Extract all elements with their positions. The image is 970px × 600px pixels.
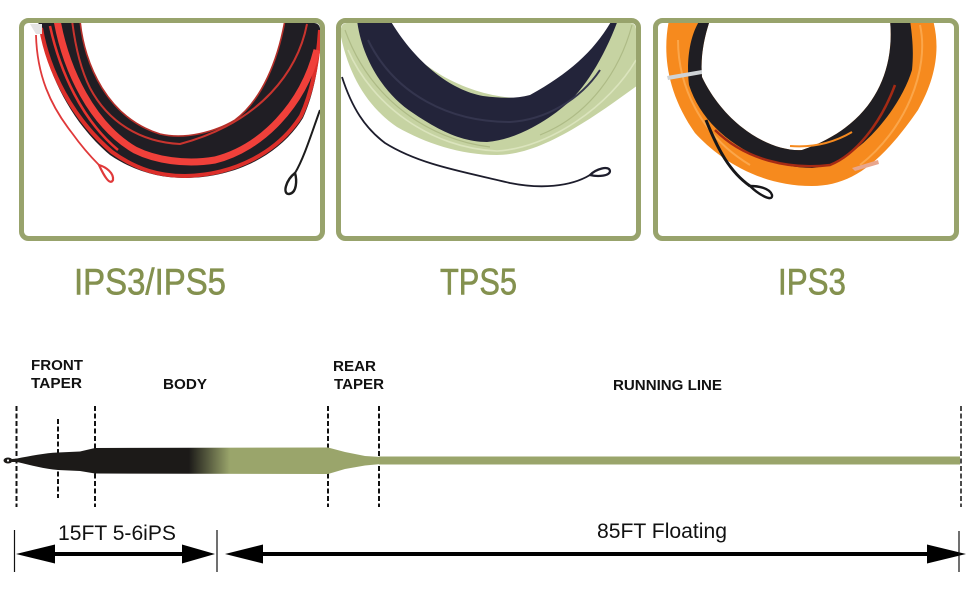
running line [379,456,960,464]
measurement: 15FT head [14,522,217,572]
panel: TPS5 green and black line [338,20,638,238]
head and body taper [12,448,381,474]
text: 85FT Floating: 85FT Floating [597,520,727,543]
section divider markers [16,406,961,507]
heading: IPS3: IPS3 [778,262,846,302]
label: rear taper: REAR [333,359,377,375]
coil: red and black line [30,20,322,194]
label: front taper: FRONT [31,358,83,374]
ticks [14,530,217,572]
coil: green and black line [338,20,638,186]
label: running line: RUNNING LINE [613,378,722,394]
panel: IPS3 orange and black line [656,20,956,238]
label: rear taper: TAPER [334,377,385,393]
heading: IPS3/IPS5: IPS3/IPS5 [74,262,226,302]
panel: IPS3/IPS5 red and black line [22,20,322,238]
frame [338,20,638,238]
measurement: 85FT running line [225,520,966,572]
arrow: running line length [225,544,966,564]
tick [958,531,960,572]
diagram: fly line taper profile [4,448,960,474]
arrow: head length [16,544,215,564]
frame [656,20,956,238]
label: front taper: TAPER [31,376,83,392]
label: body: BODY [163,377,207,393]
heading: TPS5: TPS5 [440,262,517,302]
tip loop [4,458,12,464]
frame [22,20,322,238]
coil: orange and black line [666,20,937,198]
text: 15FT 5-6iPS: 15FT 5-6iPS [58,522,176,545]
